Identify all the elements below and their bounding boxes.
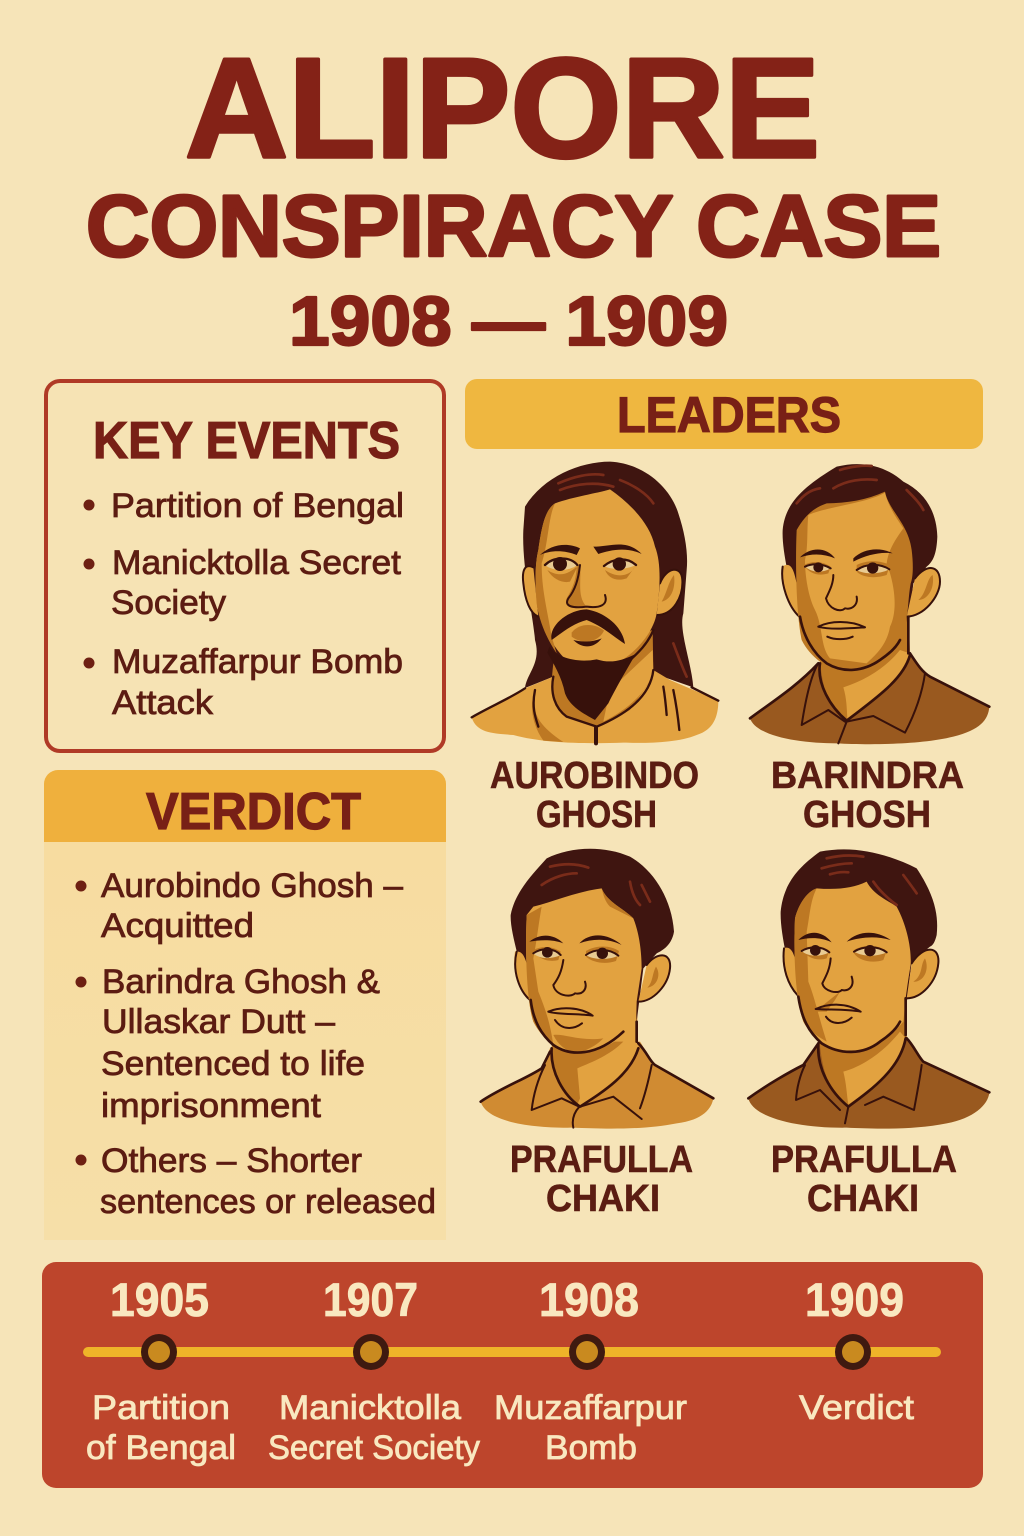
list: verdict: Aurobindo Ghosh – xyxy=(101,867,403,905)
timeline labels: Bomb xyxy=(545,1429,637,1467)
timeline years xyxy=(110,1273,904,1326)
list: verdict: Ullaskar Dutt – xyxy=(102,1003,335,1041)
portrait: Prafulla Chaki (second) xyxy=(748,849,989,1129)
heading bar: verdict xyxy=(44,770,446,842)
list: verdict: Acquitted xyxy=(101,907,254,945)
timeline labels: Muzaffarpur xyxy=(494,1389,687,1427)
heading bar: verdict: VERDICT xyxy=(146,783,361,841)
list: key events: Manicktolla Secret xyxy=(112,544,402,582)
list: verdict: Sentenced to life xyxy=(101,1045,365,1083)
list: verdict: Barindra Ghosh & xyxy=(102,963,380,1001)
list: key events: Attack xyxy=(112,684,214,722)
name labels: CHAKI xyxy=(546,1178,660,1220)
name labels: AUROBINDO xyxy=(490,755,699,797)
panel: verdict xyxy=(44,770,446,1240)
title: 1908 — 1909 xyxy=(289,282,728,360)
timeline labels: Partition xyxy=(92,1389,230,1427)
timeline years: 1909 xyxy=(805,1273,904,1326)
panel: timeline xyxy=(42,1262,983,1488)
timeline labels: Verdict xyxy=(799,1389,915,1427)
list: verdict: imprisonment xyxy=(101,1087,322,1125)
name labels: PRAFULLA xyxy=(771,1139,957,1181)
list: key events: Muzaffarpur Bomb xyxy=(112,643,403,681)
panel: key events xyxy=(46,381,444,751)
name labels: CHAKI xyxy=(807,1178,919,1220)
timeline years: 1905 xyxy=(110,1273,209,1326)
timeline labels: Secret Society xyxy=(268,1429,480,1467)
portrait: Barindra Ghosh xyxy=(750,464,989,744)
title xyxy=(86,29,941,360)
timeline years: 1907 xyxy=(323,1273,418,1326)
name labels: BARINDRA xyxy=(771,755,964,797)
name labels xyxy=(490,755,964,1220)
name labels: GHOSH xyxy=(536,794,657,836)
list: verdict: Others – Shorter xyxy=(101,1142,362,1180)
name labels: PRAFULLA xyxy=(510,1139,693,1181)
heading bar: leaders: LEADERS xyxy=(617,387,841,443)
timeline years: 1908 xyxy=(539,1273,639,1326)
list: verdict xyxy=(76,867,436,1221)
timeline labels xyxy=(86,1389,915,1467)
timeline track xyxy=(83,1347,941,1357)
title: CONSPIRACY CASE xyxy=(86,178,941,275)
heading bar: leaders xyxy=(465,379,983,449)
timeline markers xyxy=(141,1334,871,1370)
title: ALIPORE xyxy=(185,29,820,188)
list: key events: Society xyxy=(111,584,226,622)
list: key events: Partition of Bengal xyxy=(111,487,404,525)
portrait: Aurobindo Ghosh xyxy=(472,462,718,743)
heading: key events: KEY EVENTS xyxy=(93,412,400,470)
timeline labels: of Bengal xyxy=(86,1429,236,1467)
name labels: GHOSH xyxy=(803,794,931,836)
timeline labels: Manicktolla xyxy=(279,1389,461,1427)
list: key events xyxy=(84,487,404,722)
list: verdict: sentences or released xyxy=(100,1183,436,1221)
portrait: Prafulla Chaki xyxy=(481,849,713,1129)
